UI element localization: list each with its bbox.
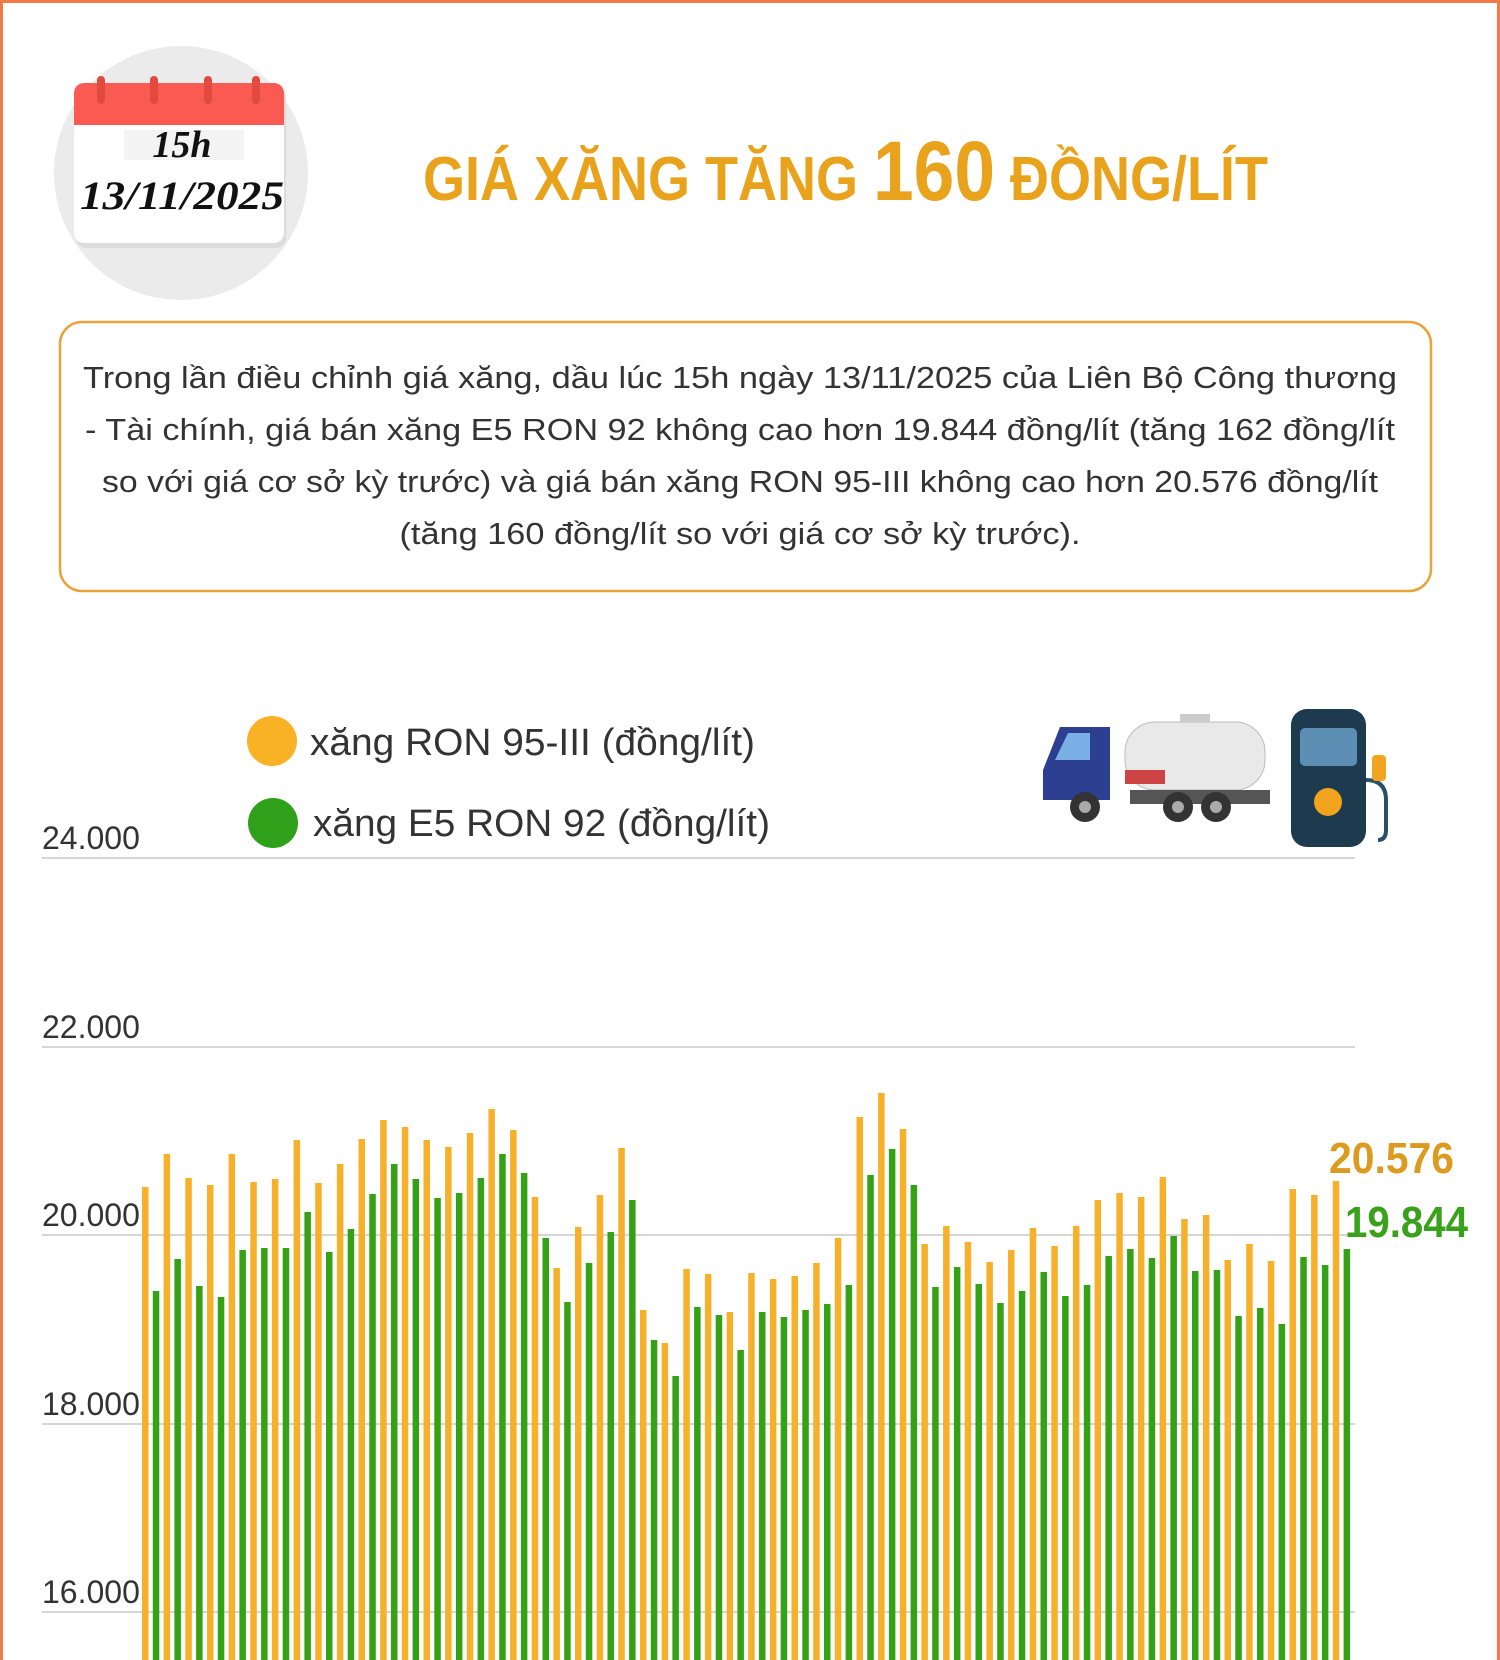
chart: end value labels: 19.844 (1345, 1198, 1468, 1247)
icon: tanker truck (1043, 714, 1270, 822)
chart: gridlines and y-axis labels: 16.000 (42, 1574, 140, 1610)
chart: gridlines and y-axis labels (42, 820, 1355, 1612)
chart: gridlines and y-axis labels: 22.000 (42, 1009, 140, 1045)
chart: gridlines and y-axis labels: 20.000 (42, 1197, 140, 1233)
icon: fuel pump (1291, 709, 1386, 847)
panel: summary text box (60, 322, 1431, 591)
chart: gridlines and y-axis labels: 24.000 (42, 820, 140, 856)
panel: summary text box: Trong lần điều chỉnh giá xăng, dầu lúc 15h ngày 13/11/2025 của Liên Bộ Công thương (83, 360, 1397, 395)
legend: xăng E5 RON 92 (đồng/lít) (313, 803, 770, 845)
icon: calendar (54, 46, 308, 300)
icon: calendar: 15h (152, 124, 212, 166)
title: GIÁ XĂNG TĂNG 160 ĐỒNG/LÍT (423, 124, 1268, 218)
chart: end value labels (1329, 1134, 1468, 1247)
chart: end value labels: 20.576 (1329, 1134, 1454, 1183)
legend: xăng RON 95-III (đồng/lít) (310, 722, 755, 764)
icon: calendar: 13/11/2025 (80, 173, 284, 218)
panel: summary text box: so với giá cơ sở kỳ trước) và giá bán xăng RON 95-III không cao hơn 20.576 đồng/lít (102, 464, 1378, 499)
legend (247, 716, 770, 848)
chart: gridlines and y-axis labels: 18.000 (42, 1386, 140, 1422)
panel: summary text box: (tăng 160 đồng/lít so với giá cơ sở kỳ trước). (400, 516, 1080, 551)
panel: summary text box: - Tài chính, giá bán xăng E5 RON 92 không cao hơn 19.844 đồng/lít (tăng 162 đồng/lít (85, 412, 1395, 447)
